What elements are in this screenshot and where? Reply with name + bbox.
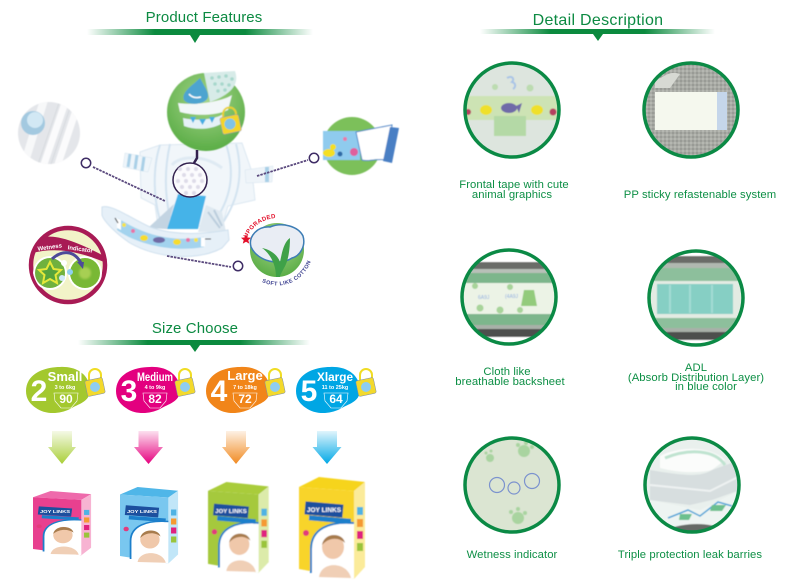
product box: blue medium <box>120 487 178 564</box>
caption: ADL layer: ADL <box>685 362 707 374</box>
heading: Size Choose: Size Choose <box>152 320 238 337</box>
arrow: orange <box>222 431 250 464</box>
product box: yellow xlarge: JOY LINKS <box>307 507 342 514</box>
left callout: soft surface <box>18 100 80 170</box>
size badge: small: 3 to 6kg <box>55 385 75 391</box>
detail photo: breathable backsheet: (4A9J <box>505 294 519 300</box>
size badge: medium <box>116 367 195 413</box>
size badge: small <box>26 367 105 413</box>
caption: ADL layer: in blue color <box>675 381 737 393</box>
caption: leak barriers: Triple protection leak barries <box>618 549 762 561</box>
detail photo: breathable backsheet: 6A9J <box>478 295 490 301</box>
size badge: medium: 82 <box>148 392 162 406</box>
lower right callout: soft like cotton <box>241 214 310 286</box>
detail photo: sticky system <box>643 62 739 158</box>
lower left callout: wetness indicator <box>28 228 105 302</box>
size badge: small: Small <box>48 369 82 384</box>
size badge: xlarge <box>296 367 376 413</box>
dotted connector: left <box>93 167 165 201</box>
marker ring: left <box>81 158 91 168</box>
detail photo: wetness indicator <box>464 437 560 533</box>
product box: pink small: JOY LINKS <box>40 510 71 515</box>
label: soft like cotton: SOFT LIKE COTTON <box>262 260 310 286</box>
icon: red star <box>241 234 251 244</box>
heading: Detail Description: Detail Description <box>533 12 663 29</box>
size badge: large: 4 <box>211 375 228 408</box>
heading: Size Choose <box>78 320 310 352</box>
heading: Product Features: Product Features <box>146 9 262 26</box>
product box: yellow xlarge <box>299 477 365 579</box>
heading: Detail Description <box>480 12 715 41</box>
diaper illustration <box>102 143 273 256</box>
product box: green large <box>208 482 269 573</box>
size badge: large <box>206 367 285 413</box>
caption: sticky system: PP sticky refastenable system <box>624 189 776 201</box>
detail photo: breathable backsheet <box>461 249 557 345</box>
icon: padlock <box>175 369 195 397</box>
arrow: green <box>48 431 76 464</box>
magnifier: perforated surface <box>173 150 207 197</box>
size badge: large: 72 <box>238 392 252 406</box>
caption: ADL layer: (Absorb Distribution Layer) <box>628 372 764 384</box>
caption: frontal tape: animal graphics <box>472 189 552 201</box>
icon: padlock <box>265 369 285 397</box>
caption: breathable backsheet: Cloth like <box>483 366 531 378</box>
size badge: xlarge: Xlarge <box>317 370 353 384</box>
caption: wetness indicator: Wetness indicator <box>467 549 558 561</box>
size badge: xlarge: 11 to 25kg <box>322 385 348 391</box>
top callout: absorbent layers <box>167 71 245 151</box>
marker ring: bottom <box>233 261 243 271</box>
icon: padlock <box>85 369 105 397</box>
arrow: pink <box>134 431 163 464</box>
product box: pink small <box>33 491 91 555</box>
caption: frontal tape: Frontal tape with cute <box>459 179 569 191</box>
label: upgraded: UPGRADED <box>243 214 276 237</box>
label: Wetness indicator: Wetness <box>37 243 63 253</box>
detail photo: leak barriers <box>644 437 740 535</box>
panel: diaper product features <box>18 70 400 304</box>
size badge: large: 7 to 18kg <box>233 385 257 391</box>
size badge: small: 2 <box>31 375 47 408</box>
caption: breathable backsheet: breathable backsheet <box>455 376 565 388</box>
product box: blue medium: JOY LINKS <box>127 510 157 515</box>
dotted connector: right <box>257 160 308 176</box>
lower left callout: wetness indicator: Indicator <box>67 245 94 255</box>
dotted connector: bottom <box>167 256 231 267</box>
arrow: blue <box>312 431 342 464</box>
right callout: fastening tape <box>323 117 399 175</box>
icon: padlock <box>356 369 376 397</box>
size badge: large: Large <box>227 368 263 383</box>
size badge: medium: 4 to 9kg <box>145 385 165 391</box>
product box: green large: JOY LINKS <box>215 509 247 515</box>
marker ring: right <box>309 153 319 163</box>
detail photo: ADL layer <box>648 250 744 346</box>
size badge: xlarge: 64 <box>329 392 343 406</box>
size badge: small: 90 <box>59 392 73 406</box>
heading: Product Features <box>87 9 313 43</box>
size badge: xlarge: 5 <box>301 375 317 408</box>
size badge: medium: Medium <box>137 370 173 384</box>
detail photo: frontal tape <box>464 62 560 158</box>
size badge: medium: 3 <box>121 375 137 408</box>
